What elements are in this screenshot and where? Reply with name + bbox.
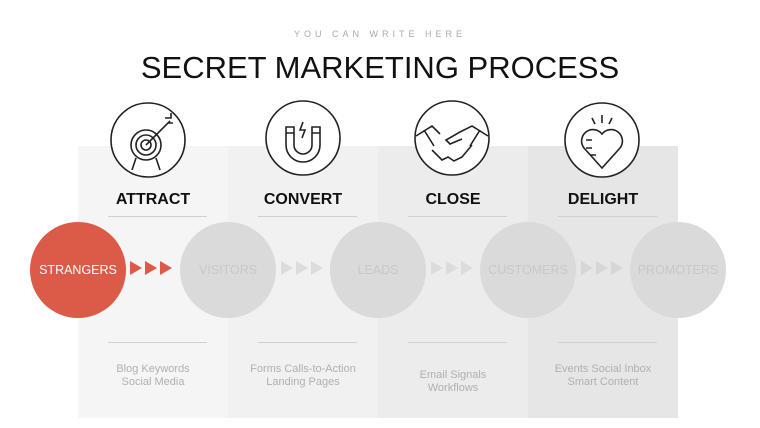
- panel: close: [378, 146, 528, 418]
- circle: customers: [480, 222, 576, 318]
- circle: promoters: PROMOTERS: [638, 263, 718, 277]
- icon: target: [111, 103, 185, 177]
- circle: visitors: VISITORS: [199, 263, 257, 277]
- circle: customers: CUSTOMERS: [488, 263, 568, 277]
- text: delight: Smart Content: [568, 376, 638, 388]
- circle: strangers: STRANGERS: [39, 263, 117, 277]
- circle: leads: [330, 222, 426, 318]
- arrow: gray 2: [431, 261, 473, 275]
- arrow: gray 1: [281, 261, 323, 275]
- panel: convert: [228, 146, 378, 418]
- text: attract: [116, 363, 190, 388]
- heading: convert: CONVERT: [264, 191, 342, 208]
- text: convert: [250, 363, 356, 388]
- subtitle: YOU CAN WRITE HERE: [294, 29, 466, 39]
- text: attract: Blog Keywords: [116, 363, 190, 375]
- text: delight: Events Social Inbox: [555, 363, 651, 375]
- title: SECRET MARKETING PROCESS: [141, 50, 619, 85]
- heading: delight: DELIGHT: [568, 191, 638, 208]
- circle: strangers: [30, 222, 126, 318]
- text: convert: Landing Pages: [266, 376, 340, 388]
- text: close: [420, 369, 486, 394]
- text: close: Email Signals: [420, 369, 486, 381]
- circle: visitors: [180, 222, 276, 318]
- circle: promoters: [630, 222, 726, 318]
- arrow: red: [130, 261, 172, 275]
- circle: leads: LEADS: [358, 263, 398, 277]
- text: convert: Forms Calls-to-Action: [250, 363, 356, 375]
- icon: handshake: [415, 101, 489, 175]
- heading: close: CLOSE: [425, 191, 481, 208]
- panel: delight: [528, 146, 678, 418]
- panel: attract: [78, 146, 228, 418]
- text: delight: [555, 363, 651, 388]
- text: close: Workflows: [428, 382, 478, 394]
- icon: heart: [565, 103, 639, 177]
- arrow: gray 3: [581, 261, 623, 275]
- icon: magnet: [266, 101, 340, 175]
- text: attract: Social Media: [122, 376, 184, 388]
- heading: attract: ATTRACT: [116, 191, 190, 208]
